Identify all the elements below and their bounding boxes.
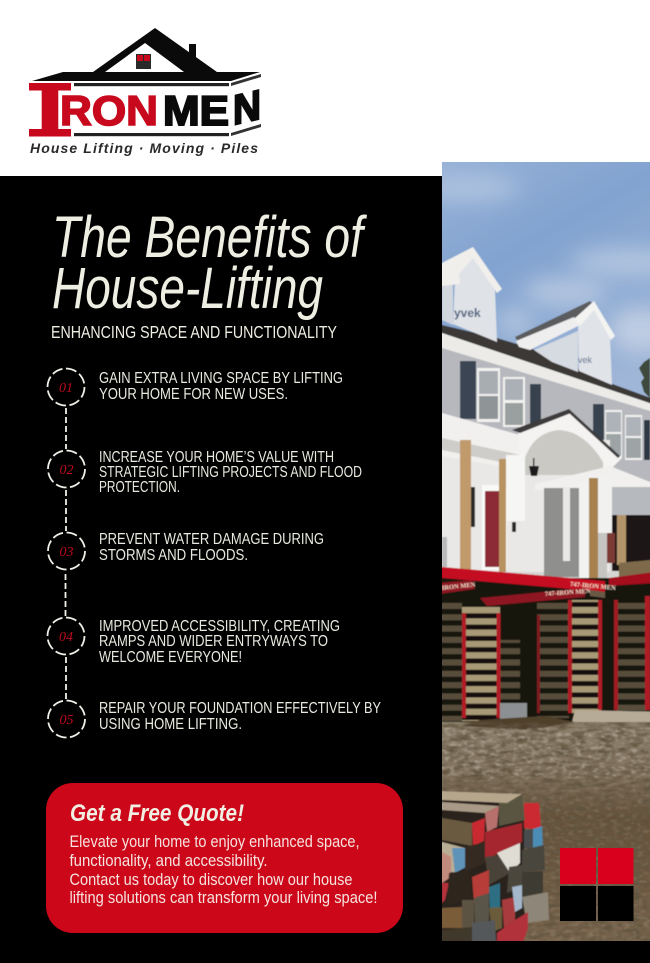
- benefit 05: [48, 700, 381, 738]
- benefit 02: INCREASE YOUR HOME’S VALUE WITH: [99, 449, 334, 466]
- photo red steel beams: [425, 566, 650, 606]
- callout body: Contact us today to discover how our house: [70, 871, 352, 889]
- benefit 02: 02: [60, 463, 74, 478]
- photo windows and shutters: [460, 361, 650, 460]
- benefit 01: 01: [59, 381, 73, 396]
- benefit 05: 05: [60, 713, 74, 728]
- callout body: [70, 833, 378, 907]
- photo dormer right: [515, 301, 615, 385]
- photo dormer left: yvek: [454, 306, 481, 320]
- logo wordmark: RON: [60, 87, 158, 134]
- bottom black strip: [442, 941, 650, 963]
- subtitle: ENHANCING SPACE AND FUNCTIONALITY: [51, 322, 337, 342]
- photo red steel beams: 747-IRON MEN: [545, 588, 591, 598]
- benefit 04: [48, 618, 340, 666]
- photo main roof: [442, 324, 650, 404]
- benefit 03: 03: [60, 545, 74, 560]
- photo porch: [425, 409, 650, 583]
- photo tree: [639, 358, 650, 398]
- title: [52, 205, 368, 321]
- benefit 03: STORMS AND FLOODS.: [99, 547, 248, 564]
- benefit 01: YOUR HOME FOR NEW USES.: [99, 386, 288, 403]
- decorative color squares: [560, 848, 634, 921]
- timeline connector dashes: [64, 408, 67, 699]
- benefit 01: [48, 368, 343, 406]
- benefit 03: [48, 531, 324, 570]
- benefit 02: PROTECTION.: [99, 479, 180, 496]
- benefit 05: REPAIR YOUR FOUNDATION EFFECTIVELY BY: [99, 700, 381, 717]
- photo house upper wall: [442, 348, 650, 482]
- photo dormer left: [442, 246, 502, 343]
- photo sky: [442, 162, 650, 398]
- photo base: [502, 562, 620, 579]
- photo timber pile: [442, 790, 550, 941]
- photo concrete block: [499, 702, 650, 723]
- logo: Iron Men: [29, 28, 261, 156]
- photo red steel beams: 747-IRON MEN: [570, 581, 616, 592]
- benefit 02: STRATEGIC LIFTING PROJECTS AND FLOOD: [99, 464, 362, 481]
- title: The Benefits of: [52, 205, 368, 270]
- photo red steel beams: IRON MEN: [441, 581, 476, 592]
- benefit 04: IMPROVED ACCESSIBILITY, CREATING: [99, 618, 340, 635]
- photo ground: [442, 715, 650, 941]
- callout: get a free quote: [46, 783, 403, 933]
- logo wordmark: ME: [163, 87, 229, 134]
- logo wordmark: I: [29, 66, 71, 154]
- photo under-house shadow: [442, 577, 610, 584]
- photo cribbing stacks: [425, 596, 650, 721]
- callout body: functionality, and accessibility.: [70, 852, 268, 870]
- callout heading: Get a Free Quote!: [70, 800, 244, 827]
- title: House-Lifting: [52, 256, 323, 321]
- benefit 04: RAMPS AND WIDER ENTRYWAYS TO: [99, 633, 328, 650]
- callout body: lifting solutions can transform your living space!: [70, 889, 378, 907]
- photo: house being lifted: [442, 162, 650, 941]
- photo dormer right: vek: [578, 355, 593, 365]
- benefit 02: [48, 449, 362, 496]
- photo wood posts: [460, 440, 650, 579]
- icon: house roof: [32, 28, 261, 136]
- black panel: [0, 176, 442, 963]
- logo wordmark: [29, 66, 261, 154]
- benefit 01: GAIN EXTRA LIVING SPACE BY LIFTING: [99, 370, 343, 387]
- benefit 05: USING HOME LIFTING.: [99, 716, 242, 733]
- timeline of benefits: [48, 368, 381, 738]
- benefit 03: PREVENT WATER DAMAGE DURING: [99, 531, 324, 548]
- logo wordmark: N: [233, 81, 261, 135]
- benefit 04: 04: [59, 630, 73, 645]
- benefit 04: WELCOME EVERYONE!: [99, 649, 242, 666]
- logo tagline: House Lifting · Moving · Piles: [30, 140, 258, 156]
- callout body: Elevate your home to enjoy enhanced space,: [70, 833, 360, 851]
